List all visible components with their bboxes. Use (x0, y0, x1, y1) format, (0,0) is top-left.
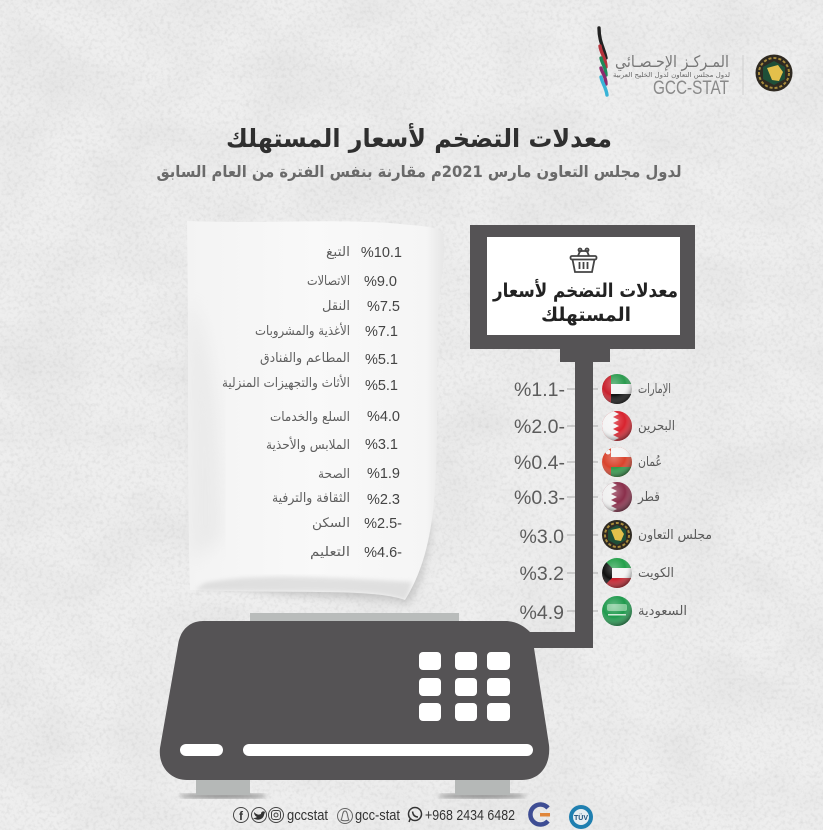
receipt row: food and beverages: %7.1 (365, 324, 398, 340)
receipt row: goods and services: %4.0 (367, 409, 400, 425)
logo: GCC-STAT wordmark: لدول مجلس التعاون لدول الخليج العربية (613, 71, 730, 79)
receipt row: furniture: %5.1 (365, 378, 398, 394)
icon: snapchat (338, 808, 352, 824)
icon: Saudi flag (602, 596, 632, 626)
row: Kuwait (520, 558, 674, 588)
receipt row: education: التعليم (310, 545, 350, 560)
receipt row: tobacco (326, 245, 402, 261)
receipt row: furniture (222, 374, 398, 394)
receipt row: food and beverages: الأغذية والمشروبات (255, 322, 350, 339)
row: Saudi Arabia: السعودية (638, 604, 687, 619)
receipt row: education (310, 545, 402, 561)
logo: GCC emblem (756, 54, 792, 92)
icon: GCC emblem (602, 520, 632, 550)
row: UAE (514, 374, 671, 404)
receipt row: restaurants and hotels: المطاعم والفنادق (260, 351, 350, 366)
row: Qatar (514, 482, 660, 512)
scale body (160, 621, 549, 780)
receipt row: transport (322, 299, 400, 315)
receipt row: furniture: الأثاث والتجهيزات المنزلية (222, 374, 350, 391)
row: Qatar: قطر (637, 490, 660, 505)
receipt row: health (318, 466, 400, 482)
icon: facebook: f (239, 809, 244, 823)
subtitle: لدول مجلس التعاون مارس 2021م مقارنة بنفس الفترة من العام السابق (156, 162, 681, 181)
receipt row: housing: %2.5- (364, 516, 402, 532)
icon: Bahrain flag (602, 411, 632, 441)
icon: twitter (252, 808, 266, 822)
logo: GCC-STAT wordmark (613, 52, 730, 99)
receipt row: tobacco: التبغ (326, 245, 350, 260)
footer: contact details (234, 804, 593, 829)
row: GCC: %3.0 (520, 526, 564, 548)
receipt row: communications (307, 274, 397, 290)
receipt row: culture: الثقافة والترفية (272, 491, 350, 506)
receipt row: clothing: %3.1 (365, 437, 398, 453)
receipt row: health: الصحة (318, 467, 350, 482)
row: Bahrain: %2.0- (514, 416, 565, 438)
receipt row: housing (312, 516, 402, 532)
row: Oman: %0.4- (514, 452, 565, 474)
scale feet (179, 780, 526, 798)
display heading: معدلات التضخم لأسعار (492, 279, 678, 302)
panel: receipt (187, 221, 444, 604)
icon: shopping basket (570, 248, 596, 272)
row: Oman (514, 447, 662, 477)
logo: TUV: TÜV (574, 813, 588, 822)
row: Kuwait: الكويت (638, 566, 674, 581)
receipt row: housing: السكن (312, 516, 350, 531)
receipt row: communications: %9.0 (364, 274, 397, 290)
icon: Kuwait flag (602, 558, 632, 588)
scale display panel (470, 225, 695, 362)
logo divider (742, 55, 744, 95)
receipt row: communications: الاتصالات (307, 274, 350, 289)
row: Oman: عُمان (638, 454, 662, 470)
scale pole and arm (500, 349, 593, 648)
receipt row: education: %4.6- (364, 545, 402, 561)
phone number: +968 2434 6482 (425, 807, 515, 824)
receipt row: goods and services (270, 409, 400, 425)
tick marks (567, 389, 598, 611)
row: Bahrain (514, 411, 675, 441)
receipt row: goods and services: السلع والخدمات (270, 410, 350, 425)
logo: GCC-STAT wordmark: GCC-STAT (653, 78, 729, 99)
row: GCC (520, 520, 712, 550)
receipt row: clothing: الملابس والأحذية (266, 436, 350, 453)
logo: GCC-STAT wordmark: المـركـز الإحـصـائي (615, 52, 729, 72)
icon: Oman flag (602, 447, 632, 477)
row: Qatar: %0.3- (514, 487, 565, 509)
handle: gccstat: gccstat (287, 807, 329, 824)
receipt row: food and beverages (255, 322, 398, 340)
scale slots (180, 744, 533, 756)
logo: TUV (569, 805, 593, 829)
receipt paper (187, 221, 444, 604)
receipt row: culture: %2.3 (367, 492, 400, 508)
receipt row: transport: النقل (322, 299, 350, 314)
receipt row: transport: %7.5 (367, 299, 400, 315)
logo: GCC-STAT ribbon (599, 28, 607, 95)
row: Bahrain: البحرين (638, 419, 675, 434)
icon: whatsapp (408, 808, 422, 822)
icon: Qatar flag (602, 482, 632, 512)
display heading: المستهلك (541, 304, 631, 326)
receipt row: health: %1.9 (367, 466, 400, 482)
row: UAE: الإمارات (638, 382, 671, 397)
display heading (492, 279, 678, 326)
receipt row: culture (272, 491, 400, 508)
receipt row: tobacco: %10.1 (361, 245, 402, 261)
title: معدلات التضخم لأسعار المستهلك (226, 123, 612, 154)
row: UAE: %1.1- (514, 379, 565, 401)
row: Kuwait: %3.2 (520, 563, 564, 585)
receipt row: restaurants and hotels (260, 351, 398, 368)
receipt row: clothing (266, 436, 398, 453)
row: Saudi Arabia (520, 596, 687, 626)
icon: UAE flag (602, 374, 632, 404)
logo: quality mark (530, 804, 550, 824)
row: GCC: مجلس التعاون (638, 528, 712, 543)
scale keypad (419, 652, 510, 721)
icon: facebook (234, 808, 248, 823)
handle: gcc-stat: gcc-stat (355, 807, 401, 824)
receipt row: restaurants and hotels: %5.1 (365, 352, 398, 368)
scale tray (250, 613, 459, 622)
row: Saudi Arabia: %4.9 (520, 602, 564, 624)
icon: instagram (268, 808, 284, 822)
